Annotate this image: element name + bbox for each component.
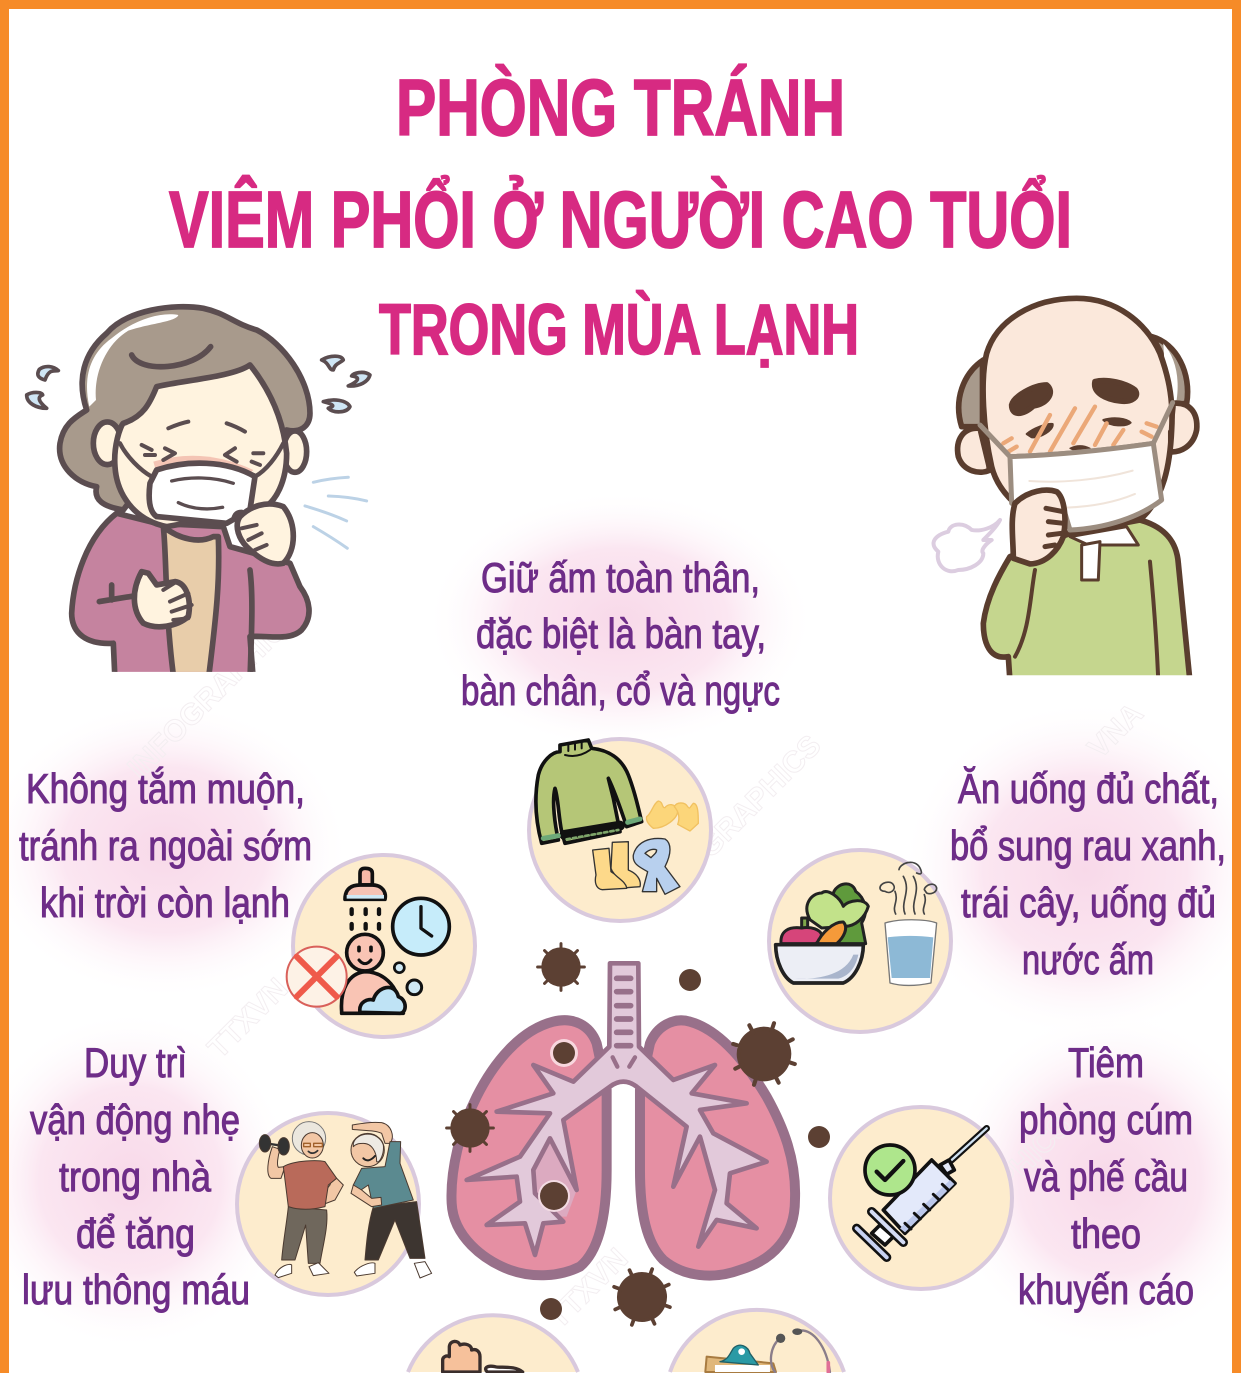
tip text: keep warm: Giữ ấm toàn thân, [481, 554, 760, 601]
tip text: vaccination: và phế cầu [1024, 1153, 1188, 1200]
watermarks: TTXVN [542, 1242, 634, 1335]
tip text: vaccination: Tiêm [1068, 1039, 1144, 1086]
icon circle: hand hygiene [408, 1315, 578, 1372]
title [169, 63, 1072, 370]
tip text: bathing: tránh ra ngoài sớm [19, 822, 312, 869]
icon circle: vaccine syringe [830, 1107, 1012, 1289]
tip text: keep warm: đặc biệt là bàn tay, [476, 610, 766, 657]
illustration: coughing elderly man [934, 298, 1197, 682]
tip text: bathing [19, 765, 312, 926]
glow: right tip two [945, 1010, 1241, 1350]
tip text: nutrition: nước ấm [1022, 936, 1154, 983]
watermarks: INFOGRAPHICS [642, 729, 828, 915]
tip text: bathing: Không tắm muộn, [26, 765, 305, 812]
watermarks: VNA [1082, 697, 1150, 765]
illustration: coughing elderly woman [27, 307, 370, 680]
tip text: vaccination: phòng cúm [1019, 1096, 1193, 1143]
title: PHÒNG TRÁNH [396, 63, 845, 152]
icon circle: warm clothes [529, 739, 711, 921]
watermarks: INFOGRAPHICS [122, 599, 308, 785]
tip text: exercise: vận động nhẹ [30, 1096, 240, 1143]
title: TRONG MÙA LẠNH [379, 291, 859, 370]
watermarks: TTXVN [202, 972, 294, 1065]
glow: left tip two [0, 1010, 295, 1350]
tip text: exercise: Duy trì [84, 1039, 187, 1086]
glow: left tip one [0, 700, 350, 1000]
tip text: keep warm [461, 554, 780, 714]
tip text: exercise [22, 1039, 250, 1313]
lungs [451, 963, 795, 1276]
tip text: bathing: khi trời còn lạnh [40, 879, 290, 926]
tip text: keep warm: bàn chân, cổ và ngực [461, 667, 780, 714]
icon circle: food and warm water [769, 850, 951, 1032]
icon circle: seniors exercising [237, 1113, 432, 1295]
watermarks [122, 599, 1150, 1335]
tip text: exercise: để tăng [76, 1210, 195, 1257]
icon circle: medical checkup [670, 1310, 844, 1372]
glow: top tip [425, 490, 815, 750]
virus particles [447, 944, 830, 1335]
tip text: nutrition [950, 765, 1226, 983]
icon circle: shower and clock [287, 855, 475, 1037]
tip text: exercise: trong nhà [59, 1153, 212, 1200]
watermarks: INFOGRAPHICS [892, 1109, 1078, 1295]
tip text: vaccination [1018, 1039, 1194, 1313]
tip text: vaccination: theo [1071, 1210, 1141, 1257]
tip text: exercise: lưu thông máu [22, 1266, 250, 1313]
tip text: vaccination: khuyến cáo [1018, 1266, 1194, 1313]
glow: right tip one [900, 700, 1241, 1040]
